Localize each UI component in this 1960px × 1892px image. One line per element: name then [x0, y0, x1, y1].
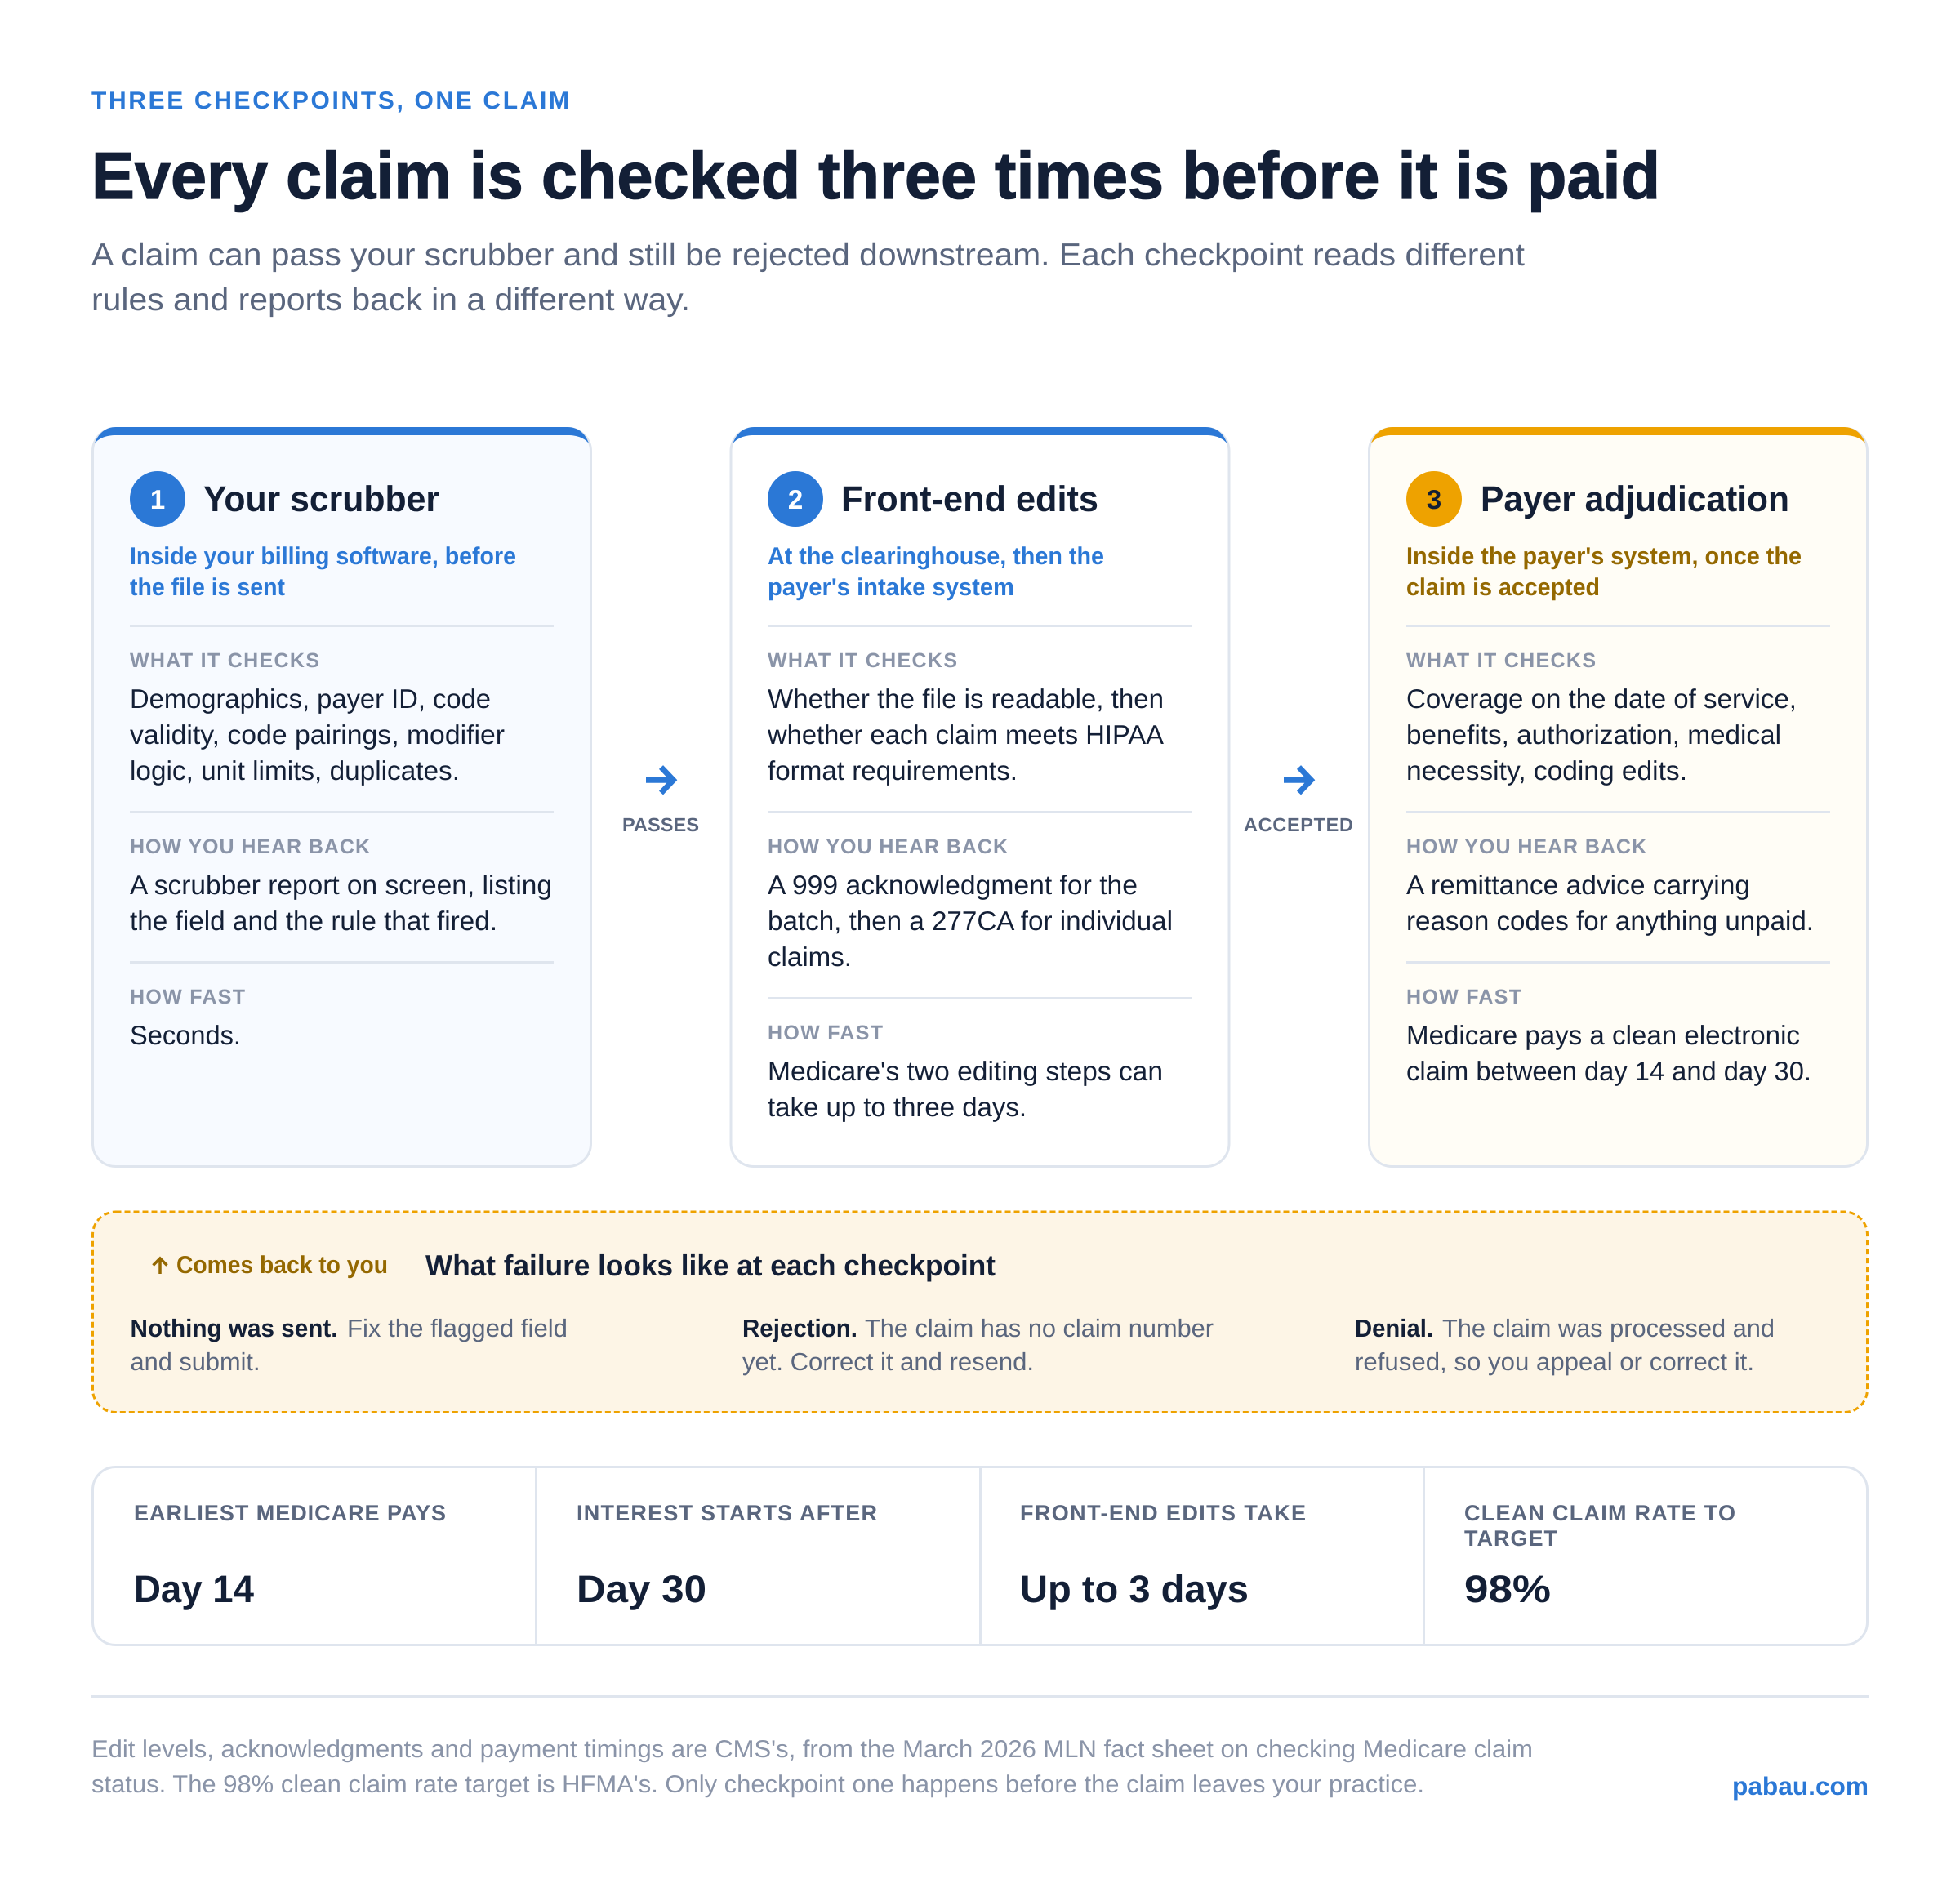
card top accent: [733, 427, 1227, 443]
number badge 2: [768, 471, 823, 527]
stat: clean claim rate: TARGET: [1464, 1526, 1558, 1551]
callout heading: What failure looks like at each checkpoint: [425, 1249, 996, 1282]
callout: what failure looks like: [93, 1212, 1867, 1413]
card heading: Payer adjudication: [1481, 479, 1789, 519]
failure: denial: refused, so you appeal or correct it.: [1355, 1348, 1754, 1376]
stats panel: [93, 1467, 1867, 1645]
number badge 2: 2: [788, 484, 803, 514]
stat: front-end edits take: Up to 3 days: [1020, 1567, 1249, 1610]
location note: Inside your billing software, before: [130, 543, 516, 570]
failure: denial: The claim was processed and: [1442, 1315, 1775, 1342]
subtitle: [91, 238, 1525, 318]
what it checks: Whether the file is readable, then: [768, 683, 1164, 714]
failure: nothing was sent: Fix the flagged field: [347, 1315, 568, 1342]
panel: checkpoint 2 front-end edits: [731, 427, 1229, 1166]
what it checks: logic, unit limits, duplicates.: [130, 755, 460, 786]
how fast: HOW FAST: [1406, 986, 1521, 1008]
what it checks: format requirements.: [768, 755, 1018, 786]
location note: At the clearinghouse, then the: [768, 543, 1104, 570]
comes back tag: Comes back to you: [176, 1252, 388, 1279]
stat: clean claim rate: 98%: [1464, 1567, 1551, 1610]
what it checks: validity, code pairings, modifier: [130, 719, 505, 750]
subtitle: A claim can pass your scrubber and still be rejected downstream. Each checkpoint reads different: [91, 238, 1525, 273]
how fast: Medicare's two editing steps can: [768, 1056, 1163, 1086]
stat: earliest medicare pays: [134, 1501, 446, 1610]
callout background: [93, 1212, 1867, 1413]
footer source note: Edit levels, acknowledgments and payment timings are CMS's, from the March 2026 MLN fact sheet on checking Medicare claim: [91, 1736, 1533, 1763]
how you hear back: [130, 835, 552, 936]
what it checks: necessity, coding edits.: [1406, 755, 1687, 786]
footer source note: status. The 98% clean claim rate target is HFMA's. Only checkpoint one happens before the claim leaves your practice.: [91, 1771, 1424, 1798]
how you hear back: A scrubber report on screen, listing: [130, 870, 552, 900]
location note: payer's intake system: [768, 574, 1014, 601]
stat: earliest medicare pays: Day 14: [134, 1567, 254, 1610]
eyebrow: THREE CHECKPOINTS, ONE CLAIM: [91, 87, 569, 114]
subtitle: rules and reports back in a different way.: [91, 283, 690, 318]
failure: nothing was sent: [131, 1315, 568, 1376]
number badge 1: [130, 471, 185, 527]
location note: the file is sent: [130, 574, 285, 601]
failure: rejection: [742, 1315, 1214, 1376]
how you hear back: HOW YOU HEAR BACK: [768, 835, 1008, 858]
how you hear back: HOW YOU HEAR BACK: [130, 835, 370, 858]
how fast: HOW FAST: [130, 986, 245, 1008]
how fast: [768, 1022, 1163, 1122]
location note: [768, 543, 1104, 601]
stat: interest starts after: [577, 1501, 877, 1610]
how you hear back: batch, then a 277CA for individual: [768, 906, 1173, 936]
how fast: claim between day 14 and day 30.: [1406, 1056, 1811, 1086]
failure: rejection: Rejection.: [742, 1315, 858, 1342]
how you hear back: claims.: [768, 942, 852, 972]
how fast: [1406, 986, 1811, 1086]
brand: pabau.com: [1732, 1772, 1869, 1801]
card heading: Your scrubber: [203, 479, 439, 519]
what it checks: WHAT IT CHECKS: [768, 649, 957, 672]
what it checks: [767, 649, 1164, 786]
how fast: Medicare pays a clean electronic: [1406, 1020, 1800, 1050]
how fast: take up to three days.: [768, 1092, 1027, 1122]
location note: Inside the payer's system, once the: [1406, 543, 1802, 570]
how you hear back: HOW YOU HEAR BACK: [1406, 835, 1646, 858]
failure: denial: [1355, 1315, 1775, 1376]
stat: interest starts after: INTEREST STARTS AFTER: [577, 1501, 877, 1525]
how you hear back: [768, 835, 1173, 972]
arrow: accepted: ACCEPTED: [1244, 814, 1353, 835]
failure: rejection: yet. Correct it and resend.: [742, 1348, 1034, 1376]
what it checks: [1406, 649, 1797, 786]
how fast: Seconds.: [130, 1020, 241, 1050]
panel: checkpoint 1 your scrubber: [93, 427, 591, 1166]
what it checks: Coverage on the date of service,: [1406, 683, 1797, 714]
stat: front-end edits take: [1020, 1501, 1306, 1610]
stats frame: [93, 1467, 1867, 1645]
what it checks: Demographics, payer ID, code: [130, 683, 491, 714]
location note: claim is accepted: [1406, 574, 1600, 601]
card background: [93, 428, 591, 1166]
how fast: HOW FAST: [768, 1022, 883, 1044]
number badge 1: 1: [150, 484, 165, 514]
stat: front-end edits take: FRONT-END EDITS TAKE: [1020, 1501, 1306, 1525]
stat: earliest medicare pays: EARLIEST MEDICARE PAYS: [134, 1501, 446, 1525]
how you hear back: [1406, 835, 1814, 936]
what it checks: WHAT IT CHECKS: [1406, 649, 1596, 672]
what it checks: WHAT IT CHECKS: [130, 649, 319, 672]
how you hear back: the field and the rule that fired.: [130, 906, 497, 936]
card heading: Front-end edits: [841, 479, 1098, 519]
how you hear back: A 999 acknowledgment for the: [768, 870, 1138, 900]
card top accent: [1371, 427, 1865, 443]
card top accent: [95, 427, 589, 443]
what it checks: benefits, authorization, medical: [1406, 719, 1781, 750]
arrow: passes: PASSES: [622, 814, 699, 835]
card background: [1369, 428, 1867, 1166]
failure: nothing was sent: and submit.: [131, 1348, 260, 1376]
card background: [731, 428, 1229, 1166]
what it checks: [130, 649, 505, 786]
panel: checkpoint 3 payer adjudication: [1369, 427, 1867, 1166]
failure: denial: Denial.: [1355, 1315, 1433, 1342]
footer source note: [91, 1736, 1533, 1798]
stat: clean claim rate: [1464, 1501, 1735, 1610]
how you hear back: reason codes for anything unpaid.: [1406, 906, 1814, 936]
stat: clean claim rate: CLEAN CLAIM RATE TO: [1464, 1501, 1735, 1525]
number badge 3: [1406, 471, 1462, 527]
number badge 3: 3: [1427, 484, 1441, 514]
failure: rejection: The claim has no claim number: [865, 1315, 1214, 1342]
arrow: accepted: [1244, 768, 1353, 835]
location note: [130, 543, 516, 601]
failure: nothing was sent: Nothing was sent.: [131, 1315, 338, 1342]
stat: interest starts after: Day 30: [577, 1567, 706, 1610]
location note: [1406, 543, 1802, 601]
how fast: [130, 986, 245, 1050]
what it checks: whether each claim meets HIPAA: [767, 719, 1164, 750]
title: Every claim is checked three times before it is paid: [91, 140, 1660, 213]
how you hear back: A remittance advice carrying: [1406, 870, 1750, 900]
arrow: passes: [622, 768, 699, 835]
